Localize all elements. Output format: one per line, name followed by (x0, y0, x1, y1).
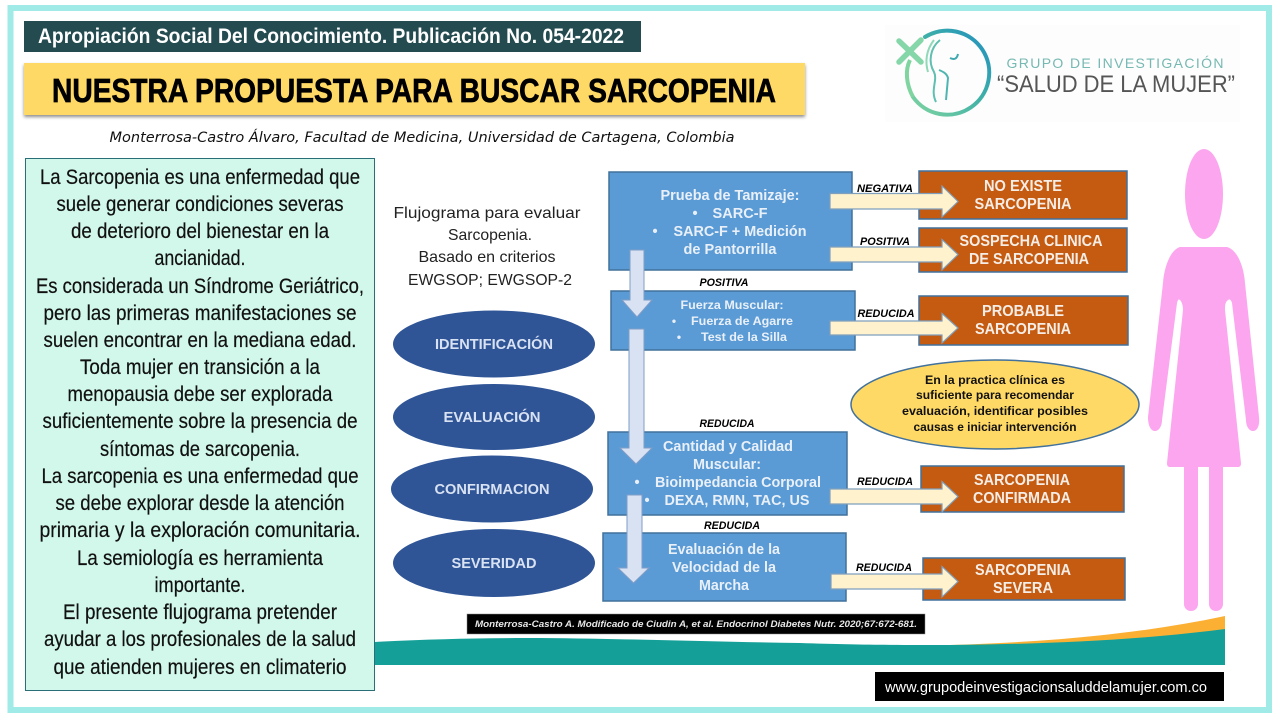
box: cantidad y calidad muscular: DEXA, RMN, TAC, US (664, 493, 810, 509)
arrow: positiva (830, 240, 958, 270)
result: probable sarcopenia (919, 296, 1128, 345)
flowchart heading: EWGSOP; EWGSOP-2 (408, 272, 572, 289)
title: NUESTRA PROPUESTA PARA BUSCAR SARCOPENIA (52, 72, 776, 109)
label: negativa: NEGATIVA (857, 183, 913, 195)
result: sarcopenia severa: SARCOPENIA (975, 562, 1071, 579)
panel: introductory text: La Sarcopenia es una enfermedad que (40, 166, 360, 189)
panel: introductory text: síntomas de sarcopenia. (100, 438, 300, 461)
panel: introductory text: El presente flujograma pretender (63, 601, 337, 624)
oval: identificación: IDENTIFICACIÓN (435, 335, 553, 353)
result: probable sarcopenia: PROBABLE (982, 303, 1064, 320)
panel: introductory text: Es considerada un Síndrome Geriátrico, (36, 275, 364, 298)
label: reducida cantidad: REDUCIDA (857, 476, 913, 488)
box: cantidad y calidad muscular (608, 432, 847, 515)
panel: introductory text: suele generar condiciones severas (56, 193, 344, 216)
callout: práctica clínica (851, 360, 1139, 449)
panel: introductory text: importante. (154, 574, 246, 597)
author line: Monterrosa-Castro Álvaro, Facultad de Medicina, Universidad de Cartagena, Colombia (110, 129, 734, 146)
title (24, 63, 805, 115)
panel: introductory text (26, 158, 374, 690)
flowchart heading: Flujograma para evaluar (394, 205, 581, 222)
box: velocidad de la marcha (603, 533, 846, 601)
result: sarcopenia confirmada (921, 466, 1124, 512)
box: velocidad de la marcha: Velocidad de la (672, 560, 777, 576)
panel: introductory text: suelen encontrar en la mediana edad. (44, 329, 356, 352)
icon: logo symbol (899, 31, 989, 115)
label: reducida marcha: REDUCIDA (856, 562, 912, 574)
decorative wave (375, 616, 1225, 665)
panel: introductory text: pero las primeras manifestaciones se (44, 302, 356, 325)
box: fuerza muscular: Fuerza Muscular: (680, 298, 784, 312)
panel: introductory text: La sarcopenia es una enfermedad que (42, 465, 358, 488)
arrow: tamizaje to fuerza (622, 250, 652, 317)
panel: introductory text: La semiología es herramienta (77, 547, 323, 570)
icon: pink woman silhouette (1148, 149, 1259, 611)
flowchart heading: Basado en criterios (418, 249, 556, 266)
box: fuerza muscular: Test de la Silla (701, 330, 787, 344)
callout: práctica clínica: evaluación, identificar posibles (902, 406, 1088, 418)
logo: “SALUD DE LA MUJER” (997, 71, 1235, 98)
result: sarcopenia confirmada: CONFIRMADA (973, 490, 1071, 507)
arrow: reducida fuerza (830, 314, 958, 343)
citation: Monterrosa-Castro A. Modificado de Ciudin A, et al. Endocrinol Diabetes Nutr. 2020;67:672-681. (475, 619, 917, 630)
oval: evaluación: EVALUACIÓN (444, 408, 540, 426)
result: sospecha clínica: SOSPECHA CLINICA (960, 233, 1102, 250)
arrow: reducida cantidad (830, 482, 958, 512)
logo: GRUPO DE INVESTIGACIÓN (1006, 55, 1224, 71)
panel: introductory text: de deterioro del bienestar en la (71, 220, 329, 243)
label: reducida fuerza: REDUCIDA (858, 308, 915, 320)
flowchart heading: Sarcopenia. (448, 227, 532, 244)
arrow: cantidad to marcha (618, 495, 649, 583)
arrow: negativa (830, 186, 958, 217)
box: cantidad y calidad muscular: Muscular: (693, 457, 761, 473)
oval: identificación (393, 310, 595, 378)
callout: práctica clínica: En la practica clínica es (925, 375, 1065, 387)
panel: introductory text: que atienden mujeres en climaterio (54, 656, 346, 679)
box: cantidad y calidad muscular: Cantidad y Calidad (663, 439, 793, 455)
box: fuerza muscular: • (672, 314, 676, 328)
panel: introductory text: suficientemente sobre la presencia de (42, 410, 358, 433)
panel: introductory text: ayudar a los profesionales de la salud (44, 628, 356, 651)
box: cantidad y calidad muscular: • (634, 475, 640, 491)
box: prueba de tamizaje: • (692, 206, 698, 222)
label: reducida superior: REDUCIDA (700, 418, 755, 430)
box: prueba de tamizaje: de Pantorrilla (684, 242, 777, 258)
oval: severidad (393, 529, 595, 597)
box: cantidad y calidad muscular: Bioimpedancia Corporal (655, 475, 821, 491)
callout: práctica clínica: suficiente para recomendar (916, 390, 1075, 402)
panel: introductory text: primaria y la exploración comunitaria. (40, 519, 360, 542)
result: no existe sarcopenia: NO EXISTE (984, 178, 1062, 195)
arrow: fuerza to cantidad (620, 329, 652, 464)
result: sospecha clínica (919, 228, 1127, 272)
oval: confirmación: CONFIRMACION (434, 482, 550, 498)
logo (885, 25, 1240, 122)
result: probable sarcopenia: SARCOPENIA (975, 321, 1071, 338)
result: no existe sarcopenia: SARCOPENIA (974, 196, 1072, 213)
box: velocidad de la marcha: Marcha (699, 578, 750, 594)
callout: práctica clínica: causas e iniciar intervención (914, 422, 1076, 434)
label: positiva central: POSITIVA (700, 277, 749, 289)
website (875, 672, 1224, 701)
result: sarcopenia confirmada: SARCOPENIA (974, 472, 1070, 489)
box: fuerza muscular (611, 291, 855, 350)
label: reducida media: REDUCIDA (704, 520, 760, 532)
result: sarcopenia severa: SEVERA (993, 580, 1053, 597)
panel: introductory text: menopausia debe ser explorada (68, 383, 333, 406)
result: sospecha clínica: DE SARCOPENIA (969, 251, 1089, 268)
panel: introductory text: se debe explorar desde la atención (56, 492, 344, 515)
box: prueba de tamizaje: • (652, 224, 658, 240)
box: fuerza muscular: • (677, 330, 681, 344)
box: prueba de tamizaje: Prueba de Tamizaje: (660, 188, 800, 204)
publication banner: Apropiación Social Del Conocimiento. Publicación No. 054-2022 (38, 25, 624, 48)
label: positiva lateral: POSITIVA (860, 236, 910, 248)
panel: introductory text: ancianidad. (154, 247, 246, 270)
arrow: reducida marcha (831, 566, 958, 597)
box: prueba de tamizaje: SARC-F (712, 206, 768, 222)
oval: severidad: SEVERIDAD (452, 556, 536, 572)
flowchart heading (394, 205, 581, 289)
oval: confirmación (391, 456, 593, 522)
box: prueba de tamizaje (609, 172, 852, 270)
box: prueba de tamizaje: SARC-F + Medición (674, 224, 806, 240)
box: fuerza muscular: Fuerza de Agarre (691, 314, 793, 328)
publication banner (24, 21, 641, 52)
oval: evaluación (393, 384, 595, 450)
result: sarcopenia severa (923, 558, 1125, 600)
website: www.grupodeinvestigacionsaluddelamujer.com.co (884, 679, 1207, 696)
box: velocidad de la marcha: Evaluación de la (668, 542, 781, 558)
citation (467, 614, 925, 634)
box: cantidad y calidad muscular: • (644, 493, 650, 509)
panel: introductory text: Toda mujer en transición a la (80, 356, 320, 379)
result: no existe sarcopenia (919, 171, 1127, 219)
